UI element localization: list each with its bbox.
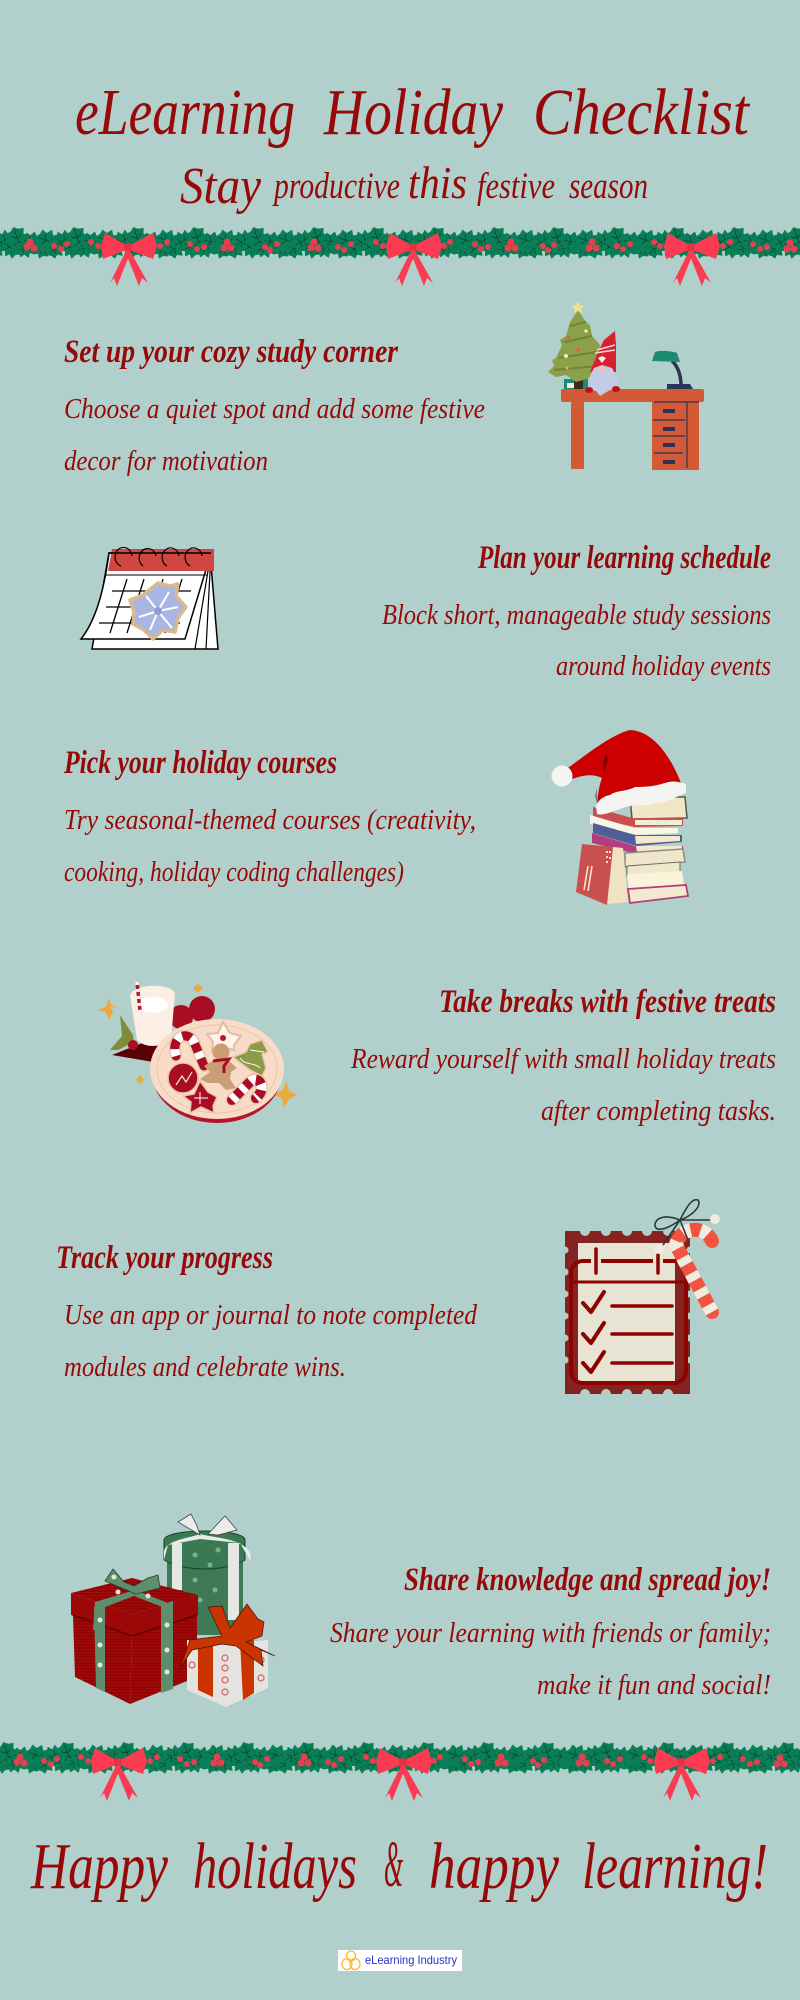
subtitle: season: [569, 166, 648, 207]
step 6 text: make it fun and social!: [537, 1669, 771, 1701]
icon: desk with tree, gnome and lamp: [548, 302, 704, 470]
icon: stacked gifts: [71, 1514, 275, 1707]
step 6 text: [330, 1562, 771, 1701]
step 5 text: [56, 1240, 477, 1383]
closing message: &: [384, 1828, 403, 1901]
step 3 text: Try seasonal-themed courses (creativity,: [64, 804, 476, 836]
title: [75, 76, 750, 149]
subtitle: Stay: [180, 158, 262, 215]
title: eLearning: [75, 76, 295, 149]
subtitle: this: [408, 157, 467, 208]
logo: eLearning Industry: eLearning Industry: [365, 1953, 457, 1967]
step 1 text: Set up your cozy study corner: [64, 334, 399, 370]
icon: santa hat on book stack: [552, 730, 688, 905]
top garland: [0, 223, 800, 286]
step 2 text: [382, 540, 771, 682]
step 3 text: [63, 745, 476, 888]
step 5 text: Use an app or journal to note completed: [64, 1299, 477, 1331]
title: Checklist: [533, 76, 750, 149]
step 5 text: Track your progress: [56, 1240, 273, 1276]
step 4 text: after completing tasks.: [541, 1095, 776, 1127]
title: Holiday: [323, 76, 504, 149]
logo: eLearning Industry: [338, 1950, 462, 1971]
step 1 text: [64, 334, 485, 477]
closing message: holidays: [193, 1830, 357, 1903]
subtitle: [180, 157, 648, 215]
step 4 text: [350, 984, 776, 1127]
step 5 text: modules and celebrate wins.: [64, 1351, 346, 1383]
icon: checklist stamp with candy cane: [562, 1200, 720, 1399]
step 3 text: cooking, holiday coding challenges): [64, 856, 404, 888]
closing message: Happy: [30, 1830, 169, 1903]
step 1 text: Choose a quiet spot and add some festive: [64, 393, 485, 425]
closing message: [30, 1828, 768, 1903]
icon: cookie plate with milk: [97, 982, 297, 1123]
step 1 text: decor for motivation: [64, 445, 268, 477]
step 3 text: Pick your holiday courses: [63, 745, 337, 781]
bottom garland: [0, 1738, 800, 1801]
closing message: happy: [429, 1830, 560, 1903]
icon: calendar with snowflake cookie: [81, 547, 218, 649]
subtitle: productive: [272, 166, 400, 207]
subtitle: festive: [477, 166, 555, 207]
